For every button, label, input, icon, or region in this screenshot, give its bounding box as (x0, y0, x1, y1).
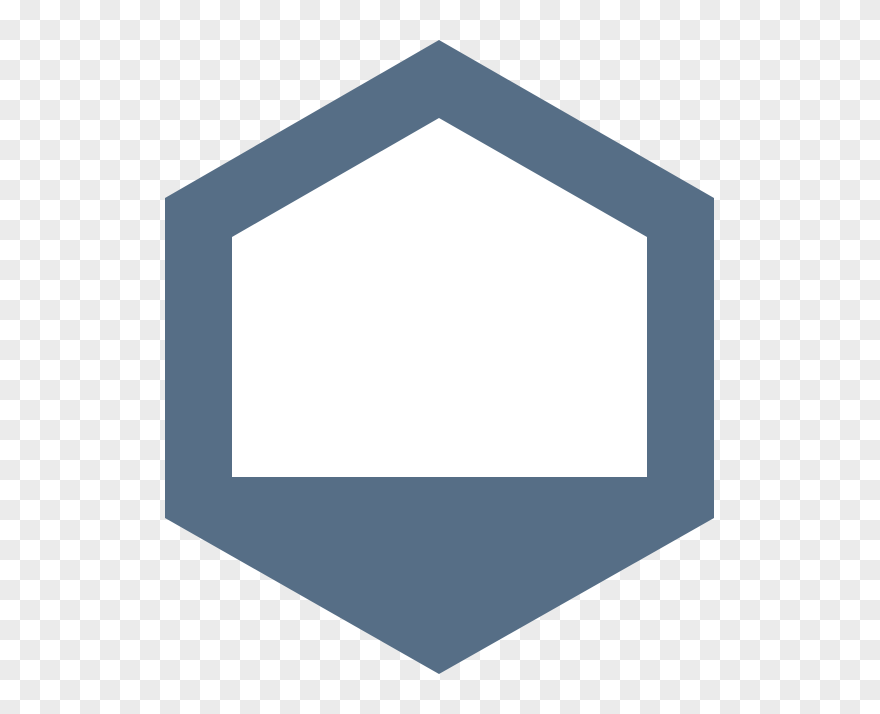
icon: hexagon (165, 40, 714, 674)
icon: house (232, 118, 647, 477)
